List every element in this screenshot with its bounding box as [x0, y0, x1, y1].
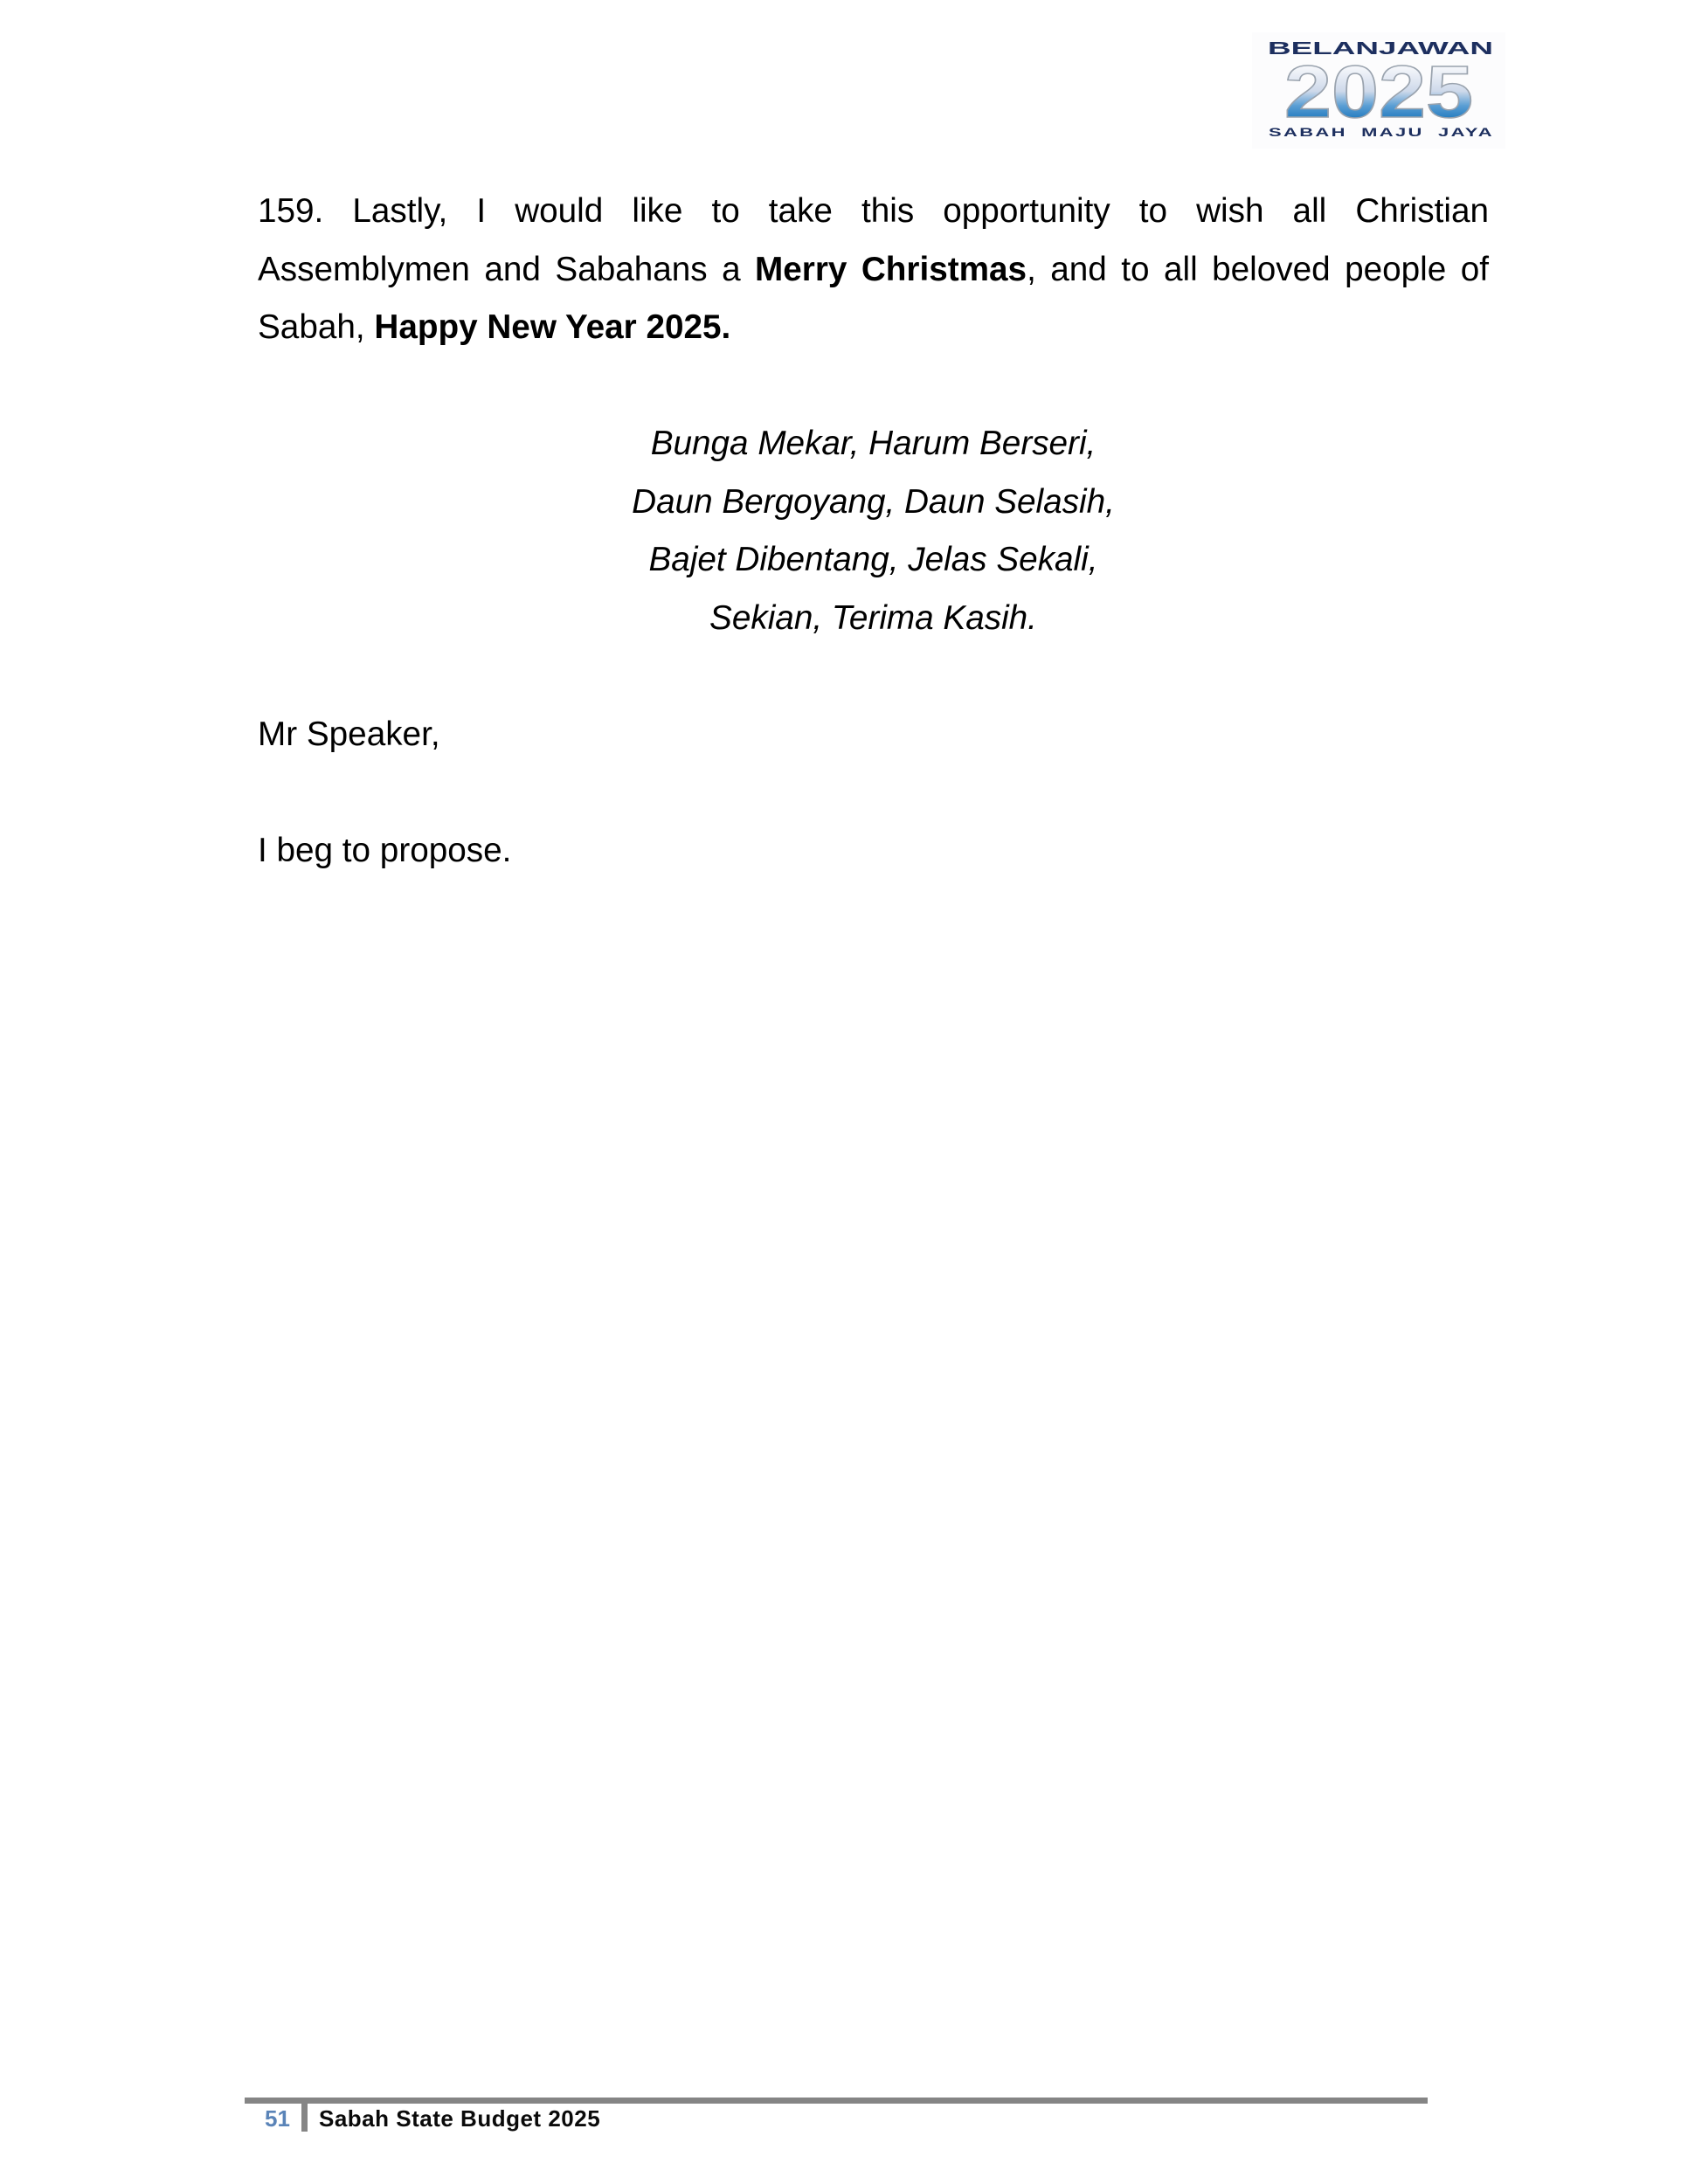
- poem verse: Bunga Mekar, Harum Berseri,: [651, 425, 1096, 462]
- salutation: Mr Speaker,: [258, 715, 440, 753]
- closing line: I beg to propose.: [258, 832, 511, 869]
- logo: Belanjawan 2025 Sabah Maju Jaya: SABAH MAJU JAYA: [1269, 125, 1494, 139]
- logo: Belanjawan 2025 Sabah Maju Jaya: BELANJAWAN: [1268, 39, 1493, 59]
- poem verse: Bajet Dibentang, Jelas Sekali,: [648, 541, 1097, 578]
- poem verse: Sekian, Terima Kasih.: [709, 599, 1037, 637]
- paragraph 159: Sabah, Happy New Year 2025.: [258, 308, 730, 346]
- logo: Belanjawan 2025 Sabah Maju Jaya: 2025: [1284, 51, 1473, 133]
- logo: Belanjawan 2025 Sabah Maju Jaya: [1268, 39, 1494, 139]
- page number: 51: [265, 2105, 290, 2132]
- paragraph 159: Assemblymen and Sabahans a Merry Christmas, and to all beloved people of: [258, 251, 1489, 288]
- paragraph 159: [258, 192, 1489, 346]
- poem verse: [632, 425, 1115, 637]
- footer: [245, 2098, 1428, 2132]
- footer title: Sabah State Budget 2025: [319, 2105, 600, 2132]
- paragraph 159: 159. Lastly, I would like to take this opportunity to wish all Christian: [258, 192, 1489, 230]
- poem verse: Daun Bergoyang, Daun Selasih,: [632, 483, 1115, 521]
